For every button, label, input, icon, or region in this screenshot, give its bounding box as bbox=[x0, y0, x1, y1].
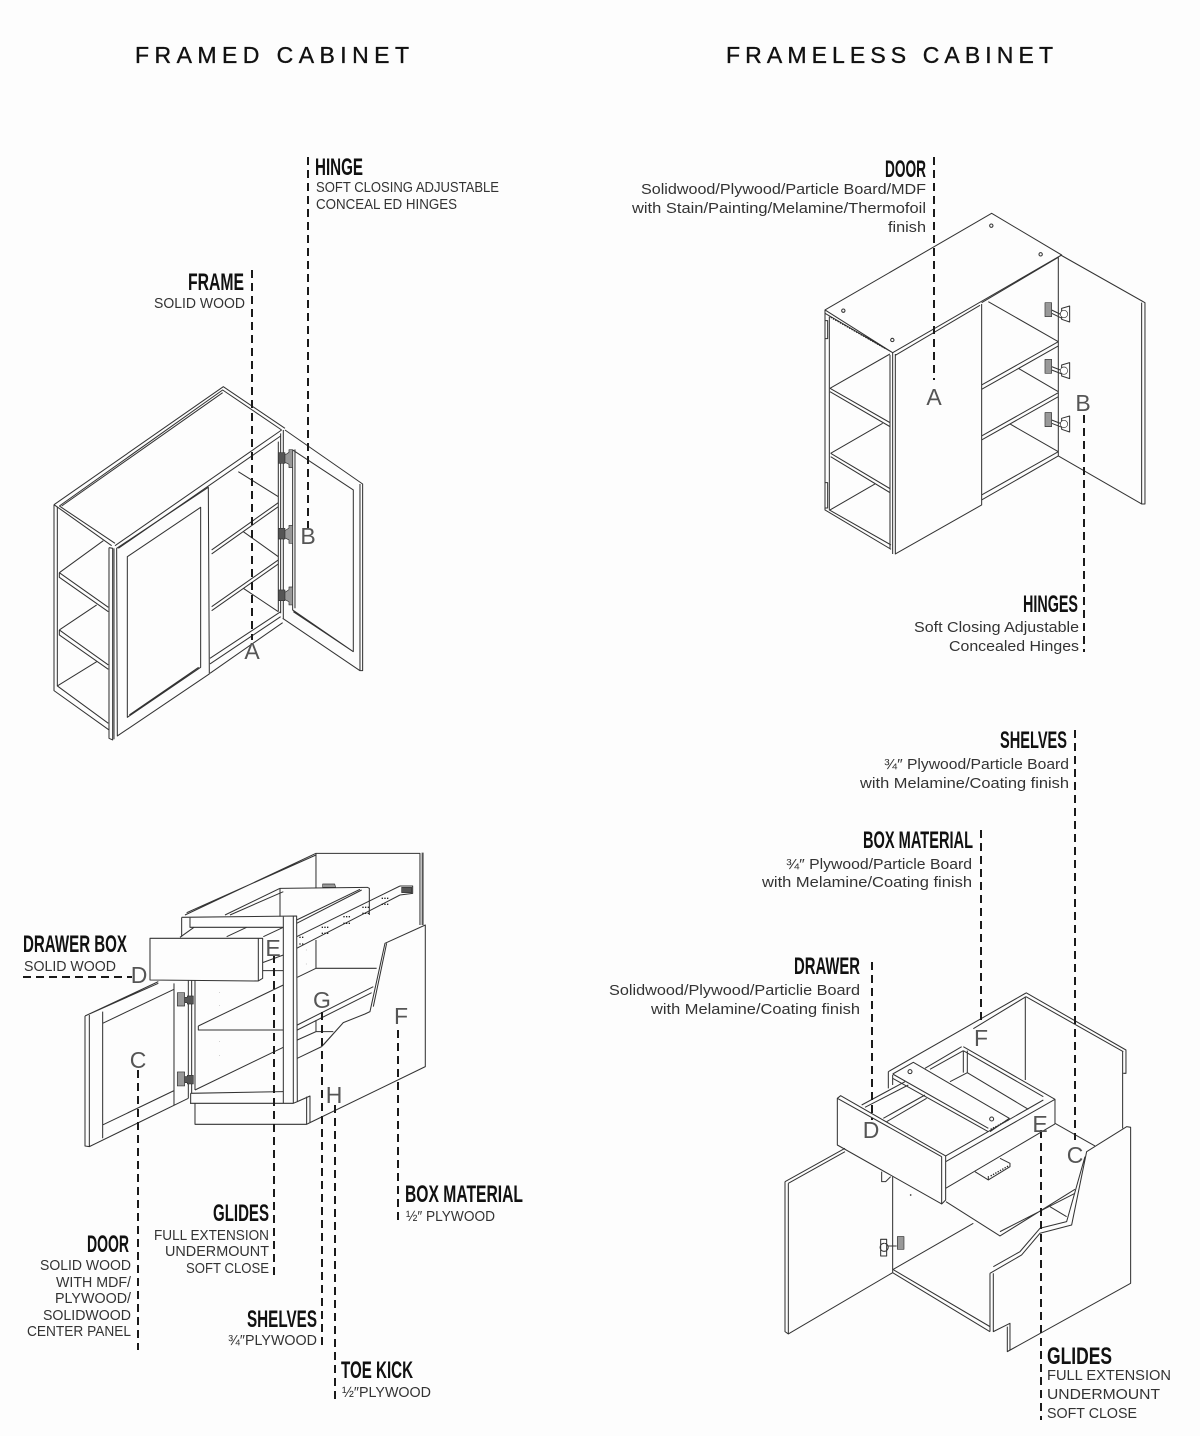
label: hinge: B bbox=[300, 523, 316, 549]
label: glides frameless: SOFT CLOSE bbox=[1047, 1406, 1137, 1422]
icon: hinge top bbox=[1045, 303, 1070, 322]
label: shelves frameless: with Melamine/Coating finish bbox=[859, 776, 1069, 792]
label: glides framed: SOFT CLOSE bbox=[186, 1261, 269, 1277]
label: door frameless: Solidwood/Plywood/Particle Board/MDF bbox=[641, 182, 926, 198]
label: shelves framed: G bbox=[313, 987, 331, 1013]
label: hinge: HINGE bbox=[315, 154, 363, 181]
label: drawer box framed: DRAWER BOX bbox=[23, 931, 127, 958]
label: toe kick framed bbox=[326, 1082, 431, 1403]
label: box material frameless: ¾″ Plywood/Particle Board bbox=[786, 857, 972, 873]
label: toe kick framed: TOE KICK bbox=[341, 1357, 413, 1384]
icon: hinge upper bbox=[177, 993, 193, 1006]
label: box material frameless: BOX MATERIAL bbox=[863, 827, 973, 854]
label: glides frameless bbox=[1032, 1111, 1171, 1422]
illustration: frameless base cabinet carcass bbox=[785, 993, 1131, 1352]
label: glides framed bbox=[154, 935, 281, 1278]
label: shelves frameless: SHELVES bbox=[1000, 727, 1067, 754]
label: glides framed: GLIDES bbox=[213, 1200, 269, 1227]
label: glides framed: FULL EXTENSION bbox=[154, 1228, 269, 1244]
label: door framed: PLYWOOD/ bbox=[55, 1291, 132, 1307]
icon: hinge top bbox=[278, 450, 293, 468]
label: glides frameless: UNDERMOUNT bbox=[1047, 1387, 1160, 1403]
label: hinges frameless: B bbox=[1075, 390, 1091, 416]
label: frame bbox=[154, 269, 260, 664]
label: toe kick framed: ½″PLYWOOD bbox=[342, 1385, 431, 1401]
label: drawer frameless: Solidwood/Plywood/Particlie Board bbox=[609, 983, 860, 999]
label: frame: A bbox=[244, 638, 260, 664]
label: glides framed: UNDERMOUNT bbox=[165, 1244, 269, 1260]
label: door frameless bbox=[631, 156, 942, 410]
label: shelves frameless: C bbox=[1067, 1142, 1083, 1168]
label: shelves frameless: ¾″ Plywood/Particle Board bbox=[884, 757, 1069, 773]
label: door frameless: DOOR bbox=[885, 156, 926, 183]
label: hinge bbox=[300, 154, 499, 549]
label: box material frameless: F bbox=[974, 1025, 988, 1051]
label: door framed: SOLID WOOD bbox=[40, 1258, 131, 1274]
label: box material framed: ½″ PLYWOOD bbox=[406, 1209, 495, 1225]
label: frame: SOLID WOOD bbox=[154, 296, 245, 312]
label: door framed: CENTER PANEL bbox=[27, 1324, 131, 1340]
label: drawer frameless bbox=[609, 953, 879, 1143]
label: box material framed: BOX MATERIAL bbox=[405, 1181, 523, 1208]
label: toe kick framed: H bbox=[326, 1082, 342, 1108]
label: box material frameless bbox=[761, 827, 988, 1051]
label: door framed: WITH MDF/ bbox=[56, 1275, 132, 1291]
label: hinge: SOFT CLOSING ADJUSTABLE bbox=[316, 180, 499, 196]
icon: hinge middle bbox=[1045, 359, 1070, 379]
label: frame: FRAME bbox=[188, 269, 244, 296]
label: door framed: SOLIDWOOD bbox=[43, 1308, 131, 1324]
icon: hinge lower bbox=[177, 1072, 193, 1086]
label: door frameless: with Stain/Painting/Melamine/Thermofoil bbox=[631, 201, 926, 217]
label: glides framed: E bbox=[265, 935, 281, 961]
title: frameless cabinet: FRAMELESS CABINET bbox=[726, 42, 1053, 68]
icon: hinge bottom bbox=[1045, 413, 1070, 432]
icon: hinge bbox=[880, 1237, 904, 1256]
label: drawer frameless: with Melamine/Coating finish bbox=[650, 1002, 860, 1018]
title: framed cabinet: FRAMED CABINET bbox=[135, 42, 409, 68]
label: shelves framed: SHELVES bbox=[247, 1306, 317, 1333]
icon: hinge bottom bbox=[278, 587, 293, 605]
label: glides frameless: GLIDES bbox=[1047, 1343, 1112, 1370]
label: shelves frameless bbox=[859, 727, 1083, 1168]
label: drawer box framed bbox=[23, 931, 147, 988]
label: drawer frameless: DRAWER bbox=[794, 953, 860, 980]
label: box material framed bbox=[394, 1003, 523, 1225]
label: glides frameless: E bbox=[1032, 1111, 1048, 1137]
label: hinges frameless bbox=[914, 390, 1091, 655]
drawer of frameless base cabinet bbox=[837, 993, 1055, 1204]
label: box material framed: F bbox=[394, 1003, 408, 1029]
illustration: framed base cabinet bbox=[85, 853, 425, 1147]
label: door framed: DOOR bbox=[87, 1231, 129, 1258]
label: hinges frameless: Soft Closing Adjustable bbox=[914, 620, 1079, 636]
label: hinges frameless: HINGES bbox=[1023, 591, 1078, 618]
label: shelves framed bbox=[228, 987, 331, 1350]
drawer slide and box of framed base cabinet bbox=[280, 884, 413, 948]
illustration: framed wall cabinet bbox=[54, 387, 363, 740]
label: hinges frameless: Concealed Hinges bbox=[949, 639, 1079, 655]
icon: hinge middle bbox=[278, 525, 293, 543]
label: door framed bbox=[27, 1047, 146, 1350]
label: drawer box framed: SOLID WOOD bbox=[24, 959, 116, 975]
label: hinge: CONCEAL ED HINGES bbox=[316, 197, 457, 213]
label: door framed: C bbox=[130, 1047, 146, 1073]
label: drawer box framed: D bbox=[131, 962, 147, 988]
label: door frameless: finish bbox=[888, 220, 926, 236]
label: box material frameless: with Melamine/Coating finish bbox=[761, 875, 972, 891]
label: door frameless: A bbox=[926, 384, 942, 410]
label: glides frameless: FULL EXTENSION bbox=[1047, 1368, 1171, 1384]
label: shelves framed: ¾″PLYWOOD bbox=[228, 1333, 317, 1349]
illustration: frameless wall cabinet bbox=[825, 213, 1145, 554]
label: drawer frameless: D bbox=[863, 1117, 879, 1143]
